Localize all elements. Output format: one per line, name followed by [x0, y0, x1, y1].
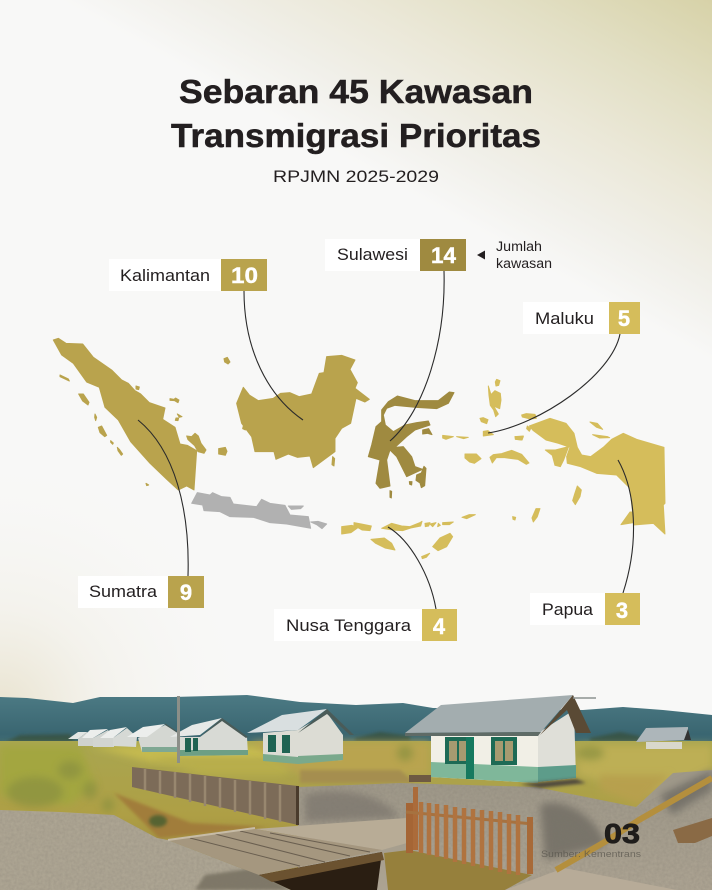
title: Transmigrasi Prioritas — [171, 117, 541, 154]
label: Sumatra: 9 — [180, 580, 192, 605]
region: Maluku — [443, 379, 540, 522]
legend note: Jumlah kawasan: Jumlah — [496, 239, 542, 254]
mountains — [0, 695, 712, 760]
field — [0, 741, 712, 890]
region: Sulawesi — [368, 392, 454, 498]
title — [171, 73, 541, 154]
label: Kalimantan: 10 — [231, 263, 258, 288]
earth trench — [384, 850, 532, 890]
plank bottom right — [505, 868, 677, 890]
label: Nusa Tenggara — [274, 609, 457, 641]
label: Maluku: 5 — [618, 306, 630, 331]
photo: transmigration settlement — [0, 695, 712, 890]
label: Papua: 3 — [616, 598, 628, 623]
label: Kalimantan — [109, 259, 267, 291]
legend note: Jumlah kawasan — [477, 239, 552, 271]
region: Nusa Tenggara — [342, 515, 475, 559]
bushes — [7, 745, 604, 812]
gravel ground — [0, 810, 291, 890]
source note: Sumber: Kementrans — [541, 849, 642, 859]
subtitle: RPJMN 2025-2029 — [273, 167, 439, 186]
label: Sumatra: Sumatra — [89, 583, 158, 601]
fence foreground — [406, 787, 533, 875]
drain line — [556, 778, 712, 870]
map of Indonesia — [53, 338, 665, 559]
row of small houses — [68, 718, 248, 756]
house mid — [247, 709, 354, 764]
wooden plank bridge — [168, 818, 407, 875]
label: Maluku — [523, 302, 640, 334]
log pile — [673, 818, 712, 843]
label: Papua — [530, 593, 640, 625]
label: Sulawesi — [325, 239, 466, 271]
region: Java (no priority areas) — [192, 493, 327, 529]
region: Kalimantan — [237, 355, 369, 468]
utility pole — [177, 696, 180, 763]
legend note: Jumlah kawasan: kawasan — [496, 256, 552, 271]
dark pit under bridge — [259, 852, 382, 890]
label: Kalimantan: Kalimantan — [120, 267, 210, 285]
label: Nusa Tenggara: Nusa Tenggara — [286, 617, 412, 635]
label: Sulawesi: 14 — [431, 243, 457, 268]
leader lines — [138, 271, 634, 609]
main house — [405, 695, 596, 788]
region: Papua — [515, 418, 665, 534]
region: Sumatra — [53, 338, 230, 490]
label: Sumatra — [78, 576, 204, 608]
label: Sulawesi: Sulawesi — [337, 246, 408, 264]
page number: 03 — [604, 818, 640, 849]
fence left — [132, 767, 299, 825]
label: Maluku: Maluku — [535, 310, 594, 328]
distant house right — [636, 727, 691, 749]
label: Nusa Tenggara: 4 — [433, 614, 446, 639]
title: Sebaran 45 Kawasan — [179, 73, 533, 110]
label: Papua: Papua — [542, 601, 594, 619]
